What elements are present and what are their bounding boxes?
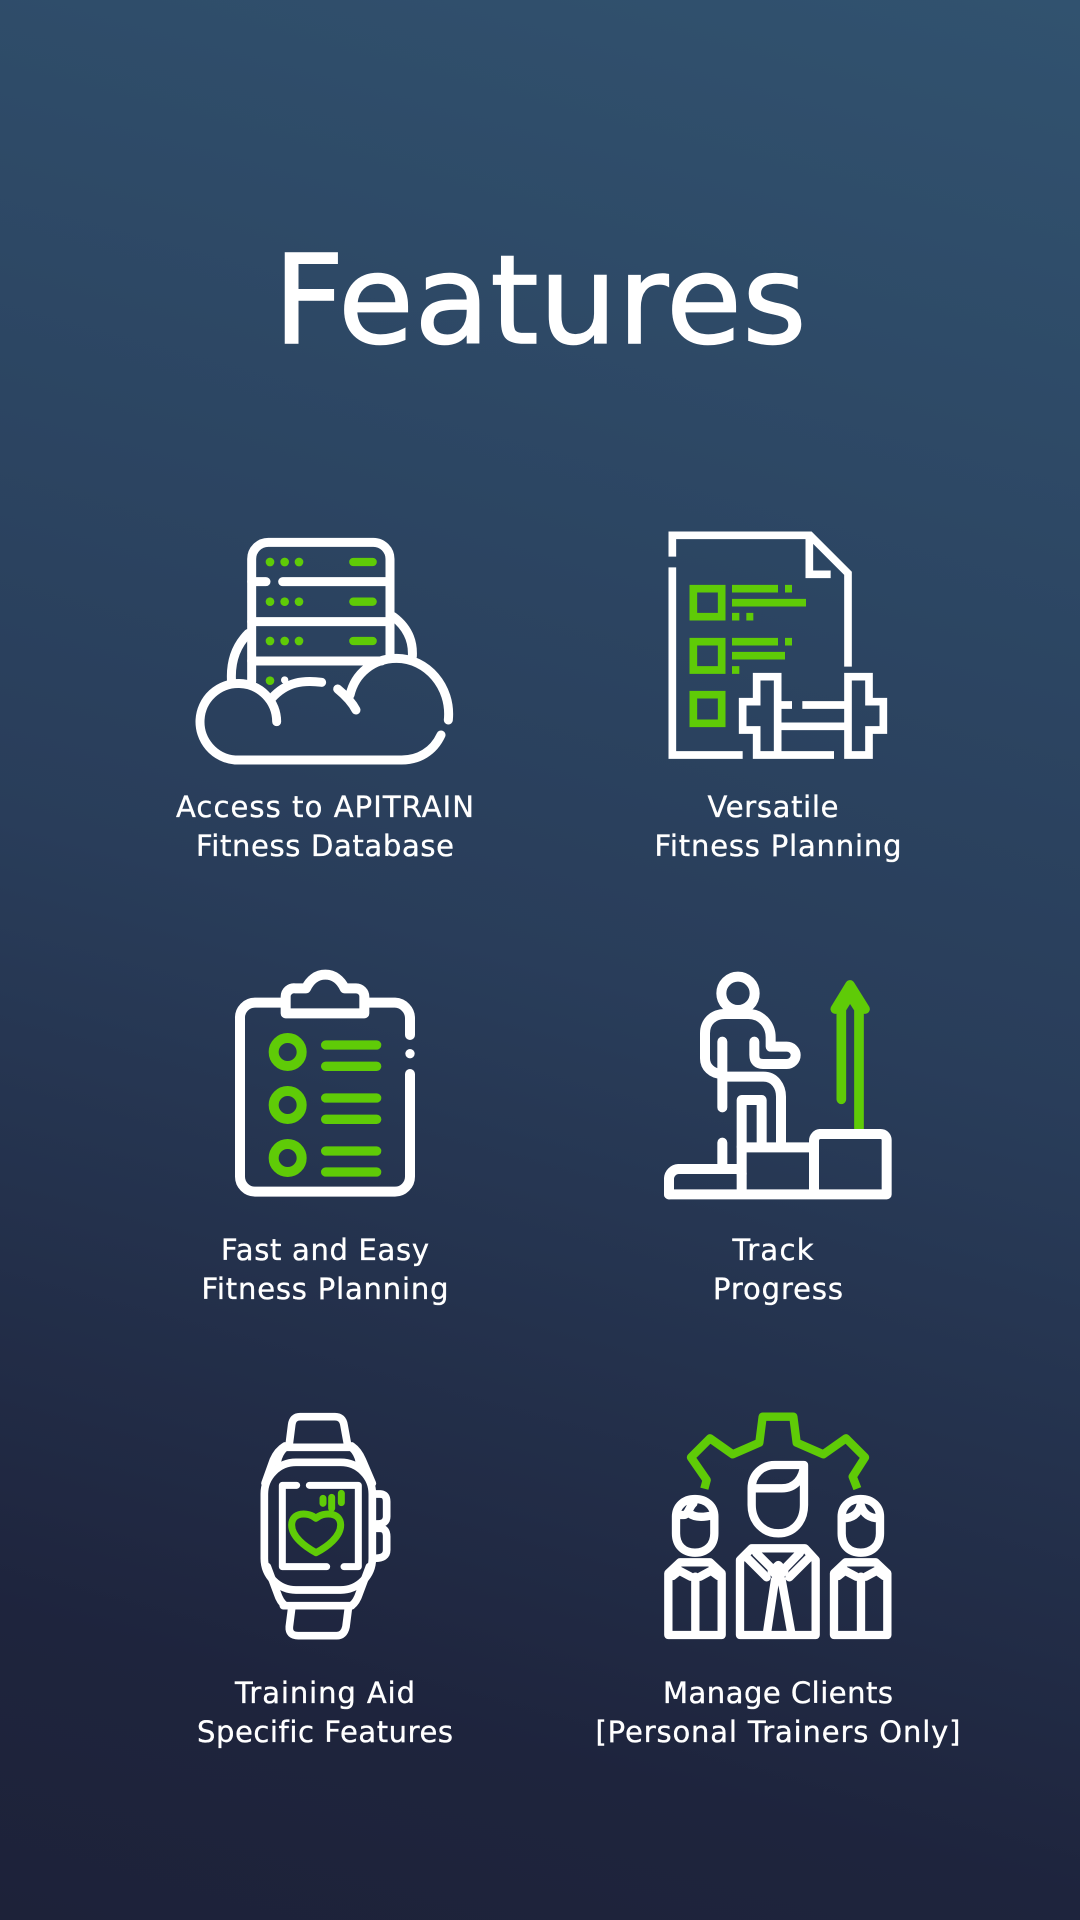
label: training aid features: Training Aid (234, 1676, 415, 1710)
panel: access to database (176, 542, 474, 863)
icon: smartwatch with heart (264, 1417, 387, 1636)
label: manage clients: Manage Clients (663, 1676, 893, 1710)
label: track progress: Progress (713, 1272, 843, 1306)
label: access to database: Access to APITRAIN (176, 790, 474, 824)
icon: checklist and dumbbell (672, 535, 883, 755)
panel: fast and easy planning (202, 975, 448, 1306)
label: training aid features: Specific Features (197, 1715, 453, 1749)
icon: server and cloud (200, 542, 449, 760)
icon: team with gear (668, 1417, 887, 1635)
label: track progress: Track (732, 1233, 814, 1267)
label: versatile fitness planning: Fitness Planning (654, 829, 902, 863)
icon: person climbing steps (669, 977, 887, 1194)
title: Features (274, 230, 806, 373)
label: versatile fitness planning: Versatile (708, 790, 838, 824)
label: fast and easy planning: Fitness Planning (202, 1272, 448, 1306)
panel: manage clients (596, 1417, 960, 1749)
label: fast and easy planning: Fast and Easy (221, 1233, 429, 1267)
panel: versatile fitness planning (654, 535, 902, 863)
label: manage clients: [Personal Trainers Only] (596, 1715, 960, 1749)
label: access to database: Fitness Database (196, 829, 454, 863)
panel: track progress (669, 977, 887, 1306)
panel: training aid features (197, 1417, 453, 1749)
icon: clipboard (240, 975, 415, 1192)
